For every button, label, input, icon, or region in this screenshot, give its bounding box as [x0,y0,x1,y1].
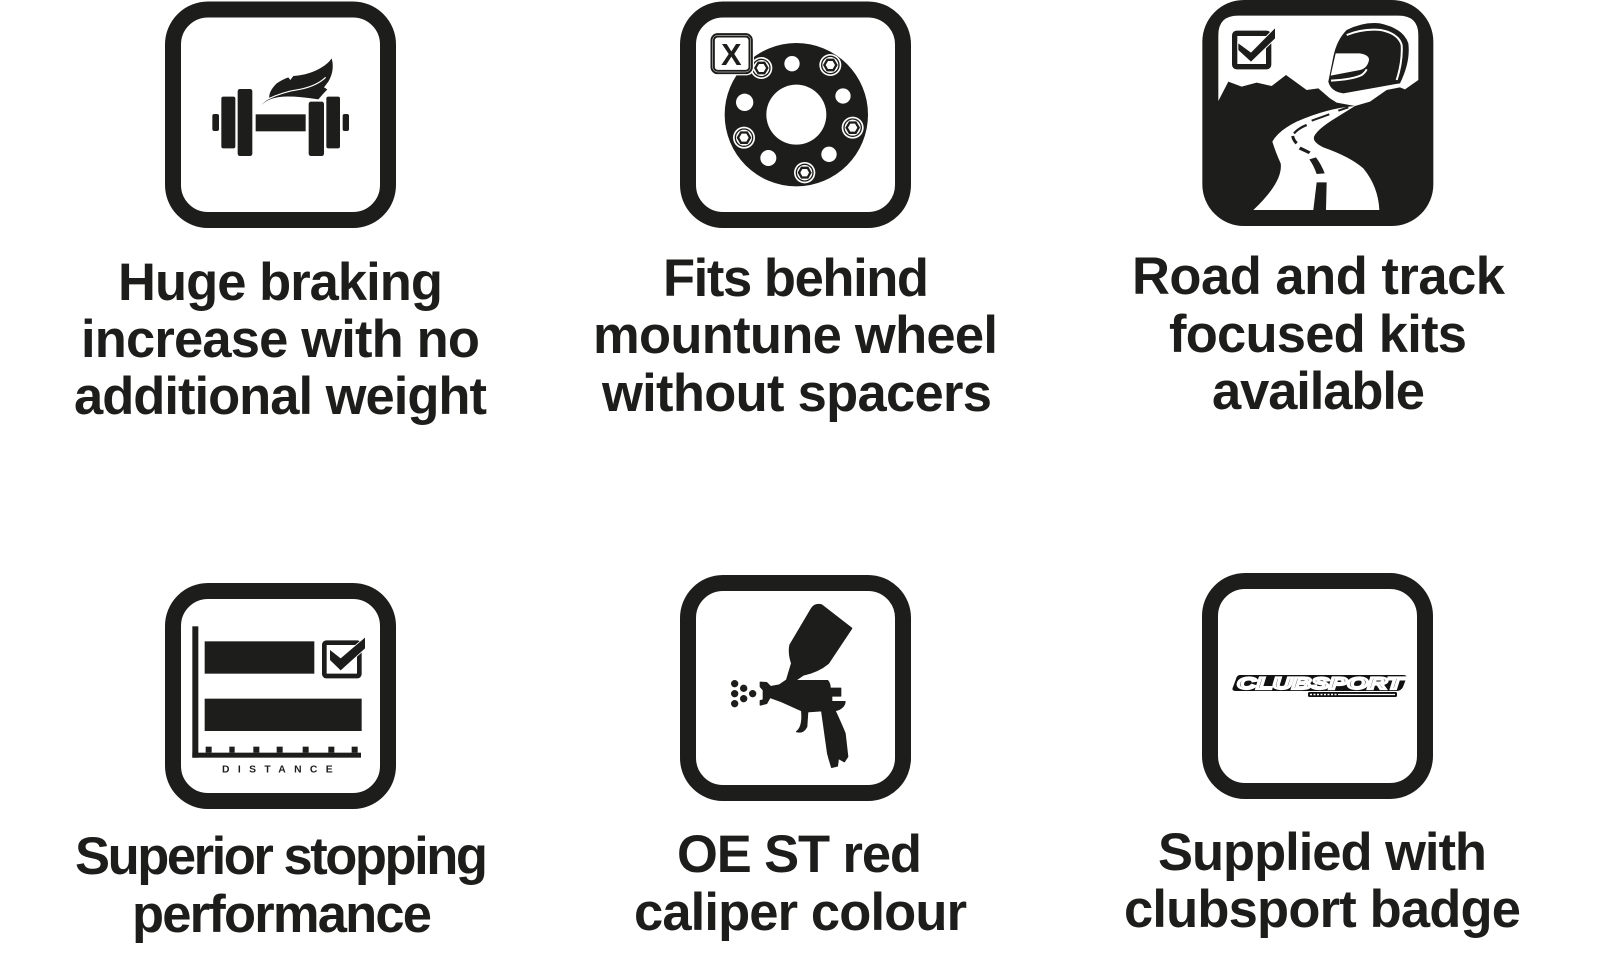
caption: fits behind wheel: mountune wheel [593,306,998,365]
icon: clubsport badge [1210,581,1425,791]
caption: stopping performance [75,827,488,944]
caption: no additional weight: Huge braking [118,253,443,312]
caption: no additional weight [74,253,487,426]
caption: road and track: focused kits [1169,305,1467,364]
caption: no additional weight: increase with no [81,310,480,369]
icon: spacer disc with bolts: X [721,38,742,72]
panel: road and track [1132,0,1506,421]
icon: distance bar chart: DISTANCE [222,764,333,775]
caption: fits behind wheel: without spacers [601,364,992,423]
caption: caliper colour: caliper colour [634,883,967,942]
icon: dumbbell and feather [173,10,388,220]
caption: clubsport badge: Supplied with [1158,823,1487,882]
caption: no additional weight: additional weight [74,367,487,426]
panel: caliper colour [634,583,967,942]
caption: road and track [1132,247,1506,421]
panel: stopping performance [75,591,488,944]
icon: spray gun [688,583,903,793]
caption: clubsport badge: clubsport badge [1124,880,1521,939]
panel: no additional weight [74,10,487,426]
icon: spacer disc with bolts [688,10,903,220]
caption: clubsport badge [1124,823,1521,939]
icon: clubsport badge: CLUBSPORT [1237,674,1406,693]
caption: stopping performance: Superior stopping [75,827,488,886]
caption: road and track: Road and track [1132,247,1506,306]
caption: caliper colour [634,825,967,942]
caption: fits behind wheel: Fits behind [663,249,929,308]
icon: road, helmet and checkbox [1202,0,1433,226]
icon: distance bar chart [173,591,388,801]
caption: caliper colour: OE ST red [677,825,922,884]
caption: fits behind wheel [593,249,998,423]
panel: fits behind wheel [593,10,998,423]
caption: stopping performance: performance [132,885,432,944]
caption: road and track: available [1212,362,1425,421]
panel: clubsport badge [1124,581,1521,939]
